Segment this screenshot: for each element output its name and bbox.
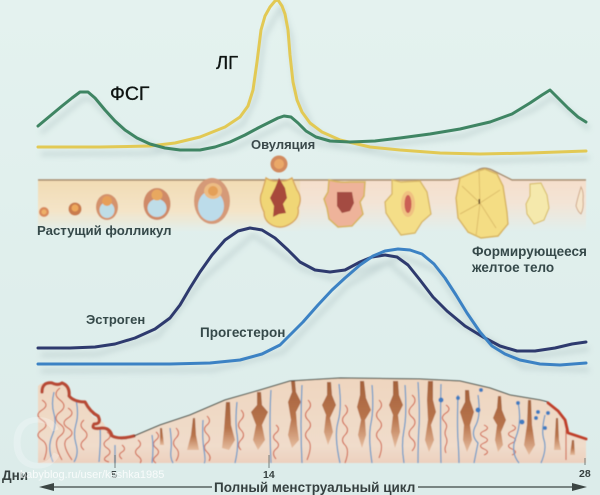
follicle 1 <box>39 207 49 217</box>
ruptured follicle <box>260 178 300 227</box>
label: forming corpus luteum: Формирующееся <box>472 244 587 259</box>
thin surface outline <box>134 378 548 436</box>
watermark: url: babyblog.ru/user/koshka1985 <box>20 469 164 481</box>
ovary tissue right <box>300 168 586 232</box>
panel: endometrium <box>38 378 586 463</box>
day caption: Дни <box>2 468 28 483</box>
label: FSH: ФСГ <box>110 83 150 105</box>
follicle 2 <box>68 202 82 216</box>
panel: gonadotropin curves <box>38 0 586 154</box>
label: LH: ЛГ <box>216 52 238 73</box>
ovary surface line <box>38 168 586 180</box>
label: forming corpus luteum <box>471 244 587 275</box>
follicle 3 <box>96 194 118 220</box>
late shedding edge <box>548 403 586 439</box>
panel: ovarian hormone curves <box>38 228 586 365</box>
label: ovulation: Овуляция <box>251 137 315 152</box>
arrow: cycle left <box>39 483 212 491</box>
curve: LH yellow <box>38 0 586 154</box>
label: forming corpus luteum: желтое тело <box>471 260 554 275</box>
endometrium tissue <box>38 378 586 463</box>
label: estrogen: Эстроген <box>86 312 145 327</box>
axis: day labels <box>2 468 591 483</box>
follicle 4 <box>144 188 170 220</box>
label: growing follicle: Растущий фолликул <box>37 223 172 238</box>
curve shadows <box>41 7 589 371</box>
ovary tissue left <box>38 180 300 232</box>
arrow: cycle right <box>418 483 587 491</box>
ovum released <box>270 156 288 172</box>
watermark: faint C: С <box>10 404 62 484</box>
day tick marks <box>115 455 585 468</box>
corpus luteum developing <box>385 180 431 235</box>
follicle 5 <box>194 178 230 224</box>
curve: FSH green <box>38 90 586 150</box>
panel: ovary band <box>38 156 586 238</box>
curve: estrogen <box>38 228 586 351</box>
day 14: 14 <box>263 469 275 481</box>
blue veins <box>50 382 545 463</box>
curve: progesterone <box>38 249 586 365</box>
corpus luteum early <box>324 180 365 227</box>
axis title: Полный менструальный цикл <box>214 480 415 495</box>
day 5: 5 <box>111 469 117 481</box>
day 28: 28 <box>579 468 591 480</box>
blue terminal dots <box>438 388 550 430</box>
label: progesterone: Прогестерон <box>200 325 285 340</box>
corpus albicans <box>576 187 583 214</box>
corpus luteum regressing <box>526 183 549 224</box>
menstrual surface shedding <box>42 383 134 438</box>
red spiral arteries <box>38 388 566 463</box>
corpus luteum mature <box>456 169 508 238</box>
brown glands <box>160 381 575 455</box>
